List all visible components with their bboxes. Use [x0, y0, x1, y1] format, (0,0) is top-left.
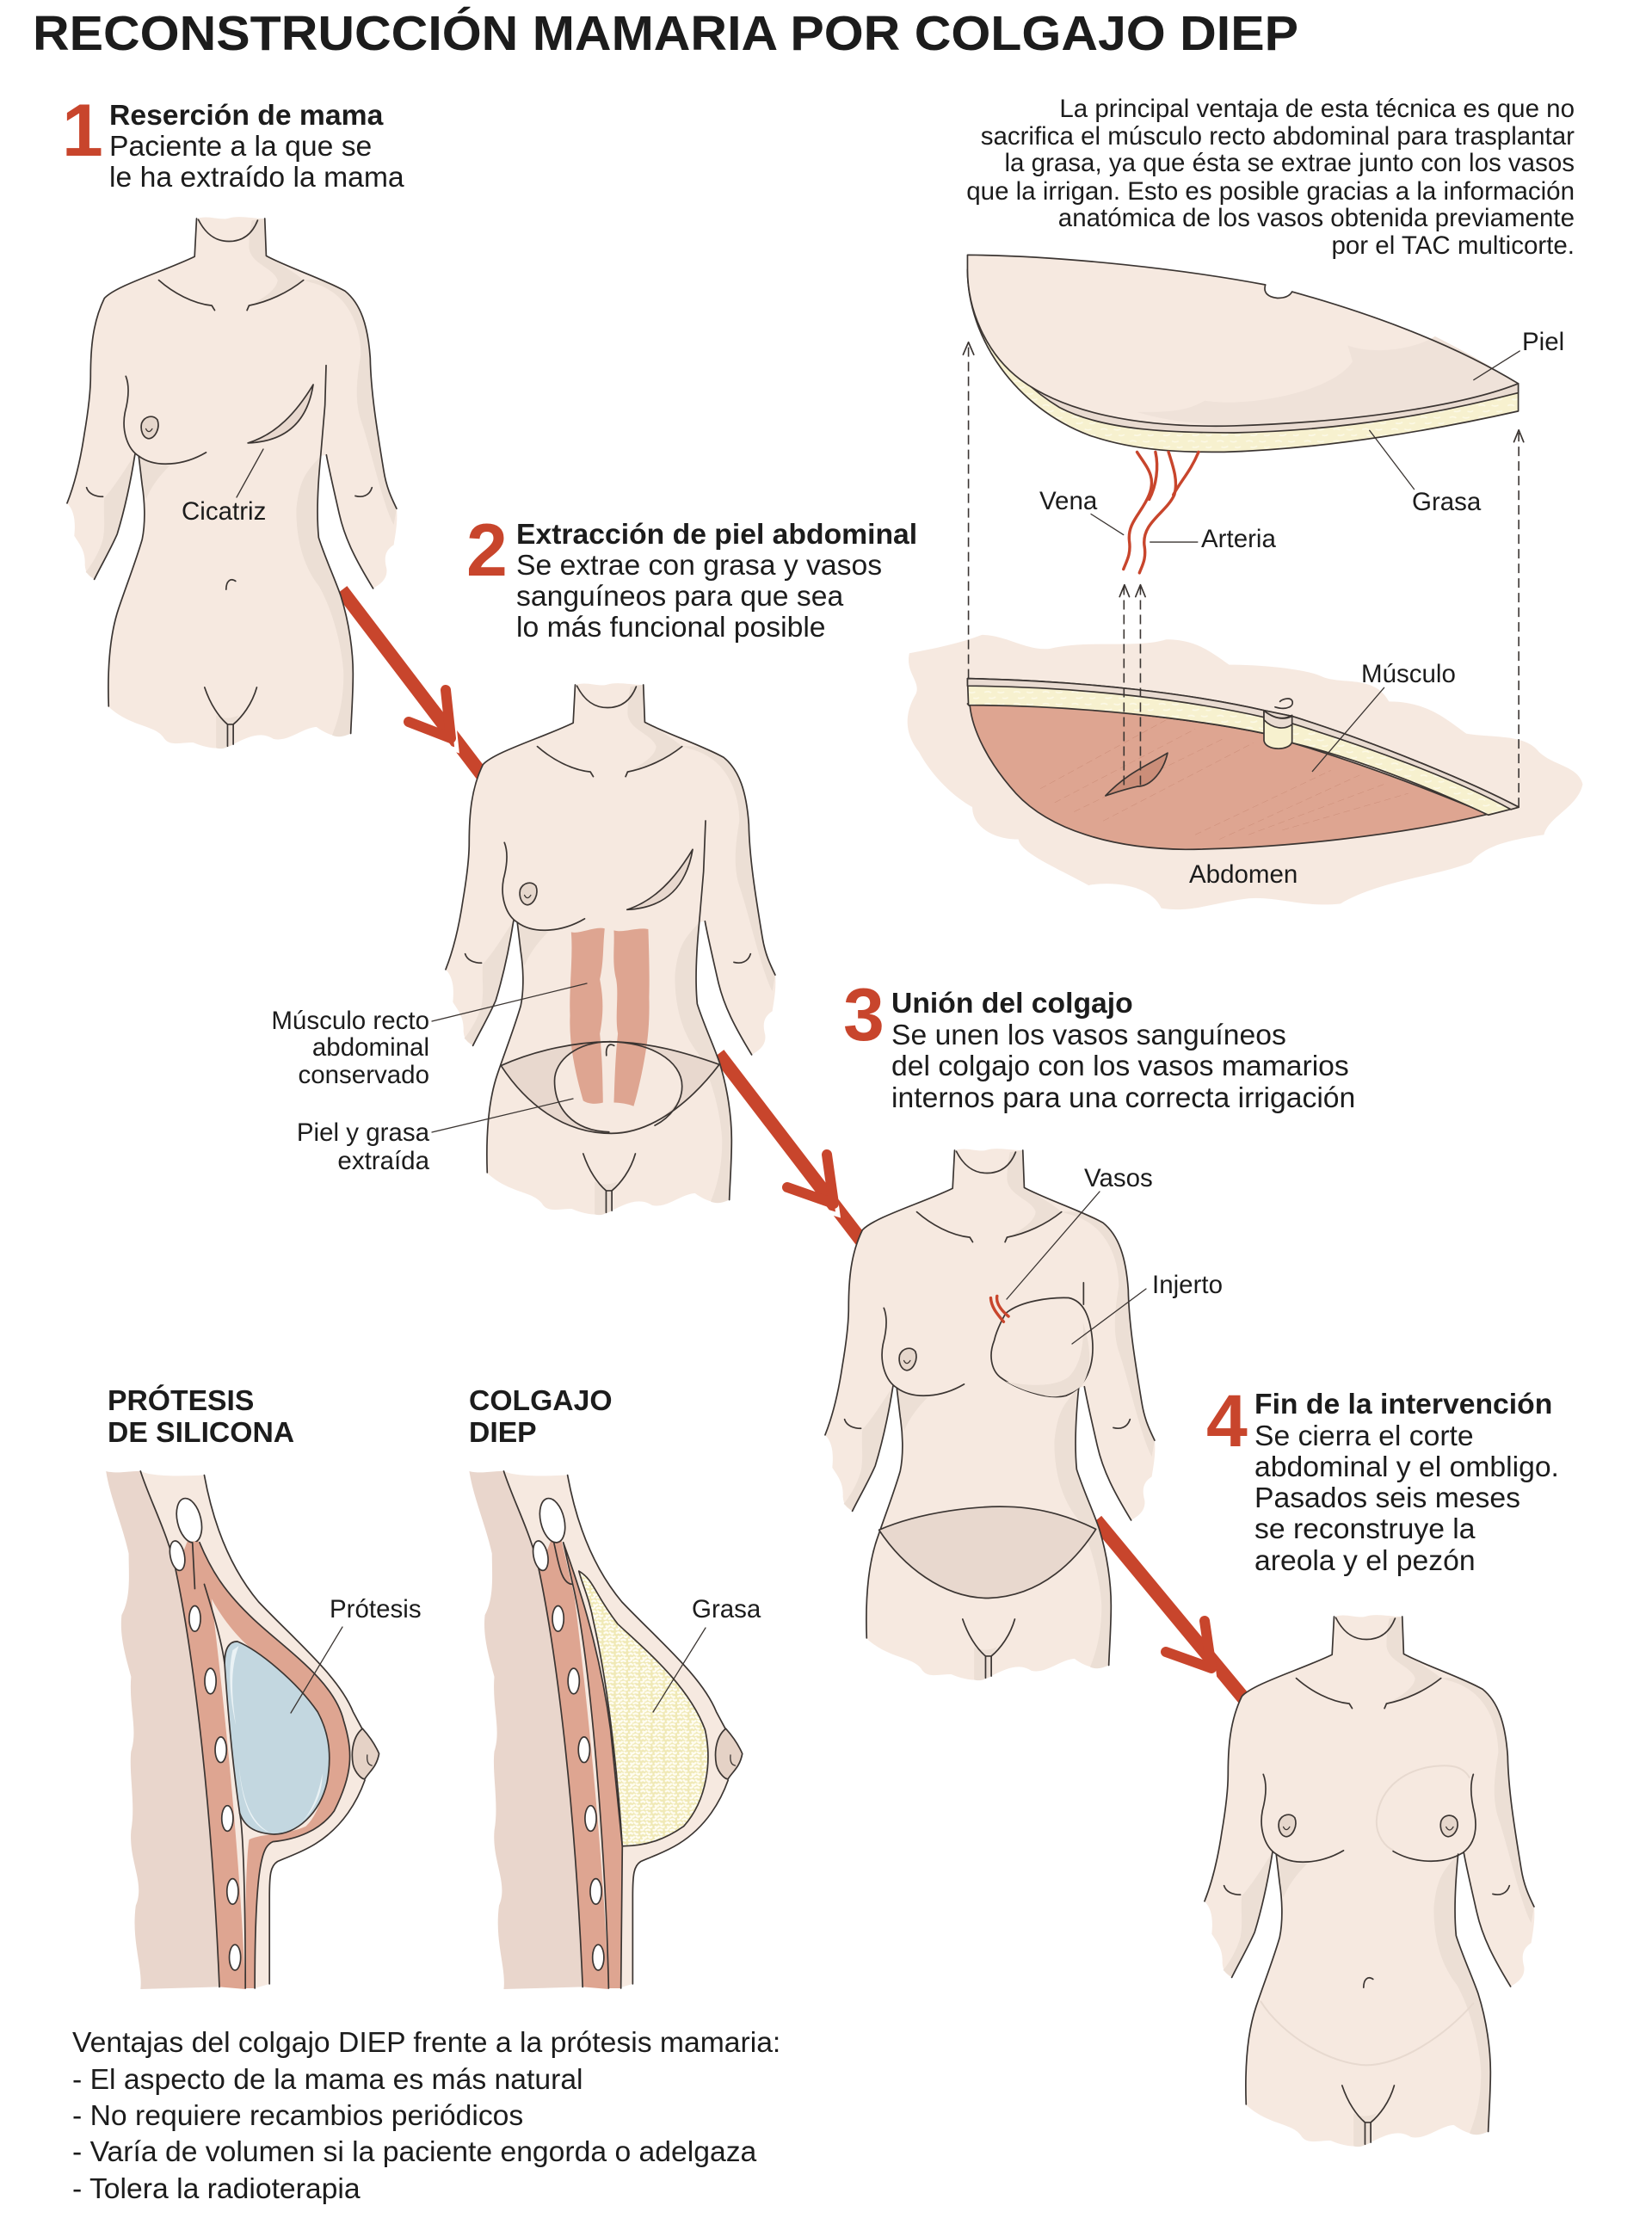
arrow: step 3 to step 4	[1096, 1520, 1258, 1716]
step 2 text: sanguíneos para que sea	[516, 580, 843, 613]
advantages list: Ventajas del colgajo DIEP frente a la prótesis mamaria:	[72, 2026, 780, 2059]
step 2 text: Extracción de piel abdominal	[516, 518, 917, 551]
diagram: DIEP flap in breast	[469, 1471, 743, 1989]
step 4 text: Pasados seis meses	[1254, 1482, 1520, 1514]
incision	[1106, 753, 1168, 796]
label: prótesis	[291, 1595, 422, 1713]
top-right explanatory text: la grasa, ya que ésta se extrae junto con los vasos	[1005, 149, 1575, 177]
step 1 text	[62, 89, 404, 194]
advantages list	[72, 2026, 780, 2205]
skin layer abdomen	[967, 679, 1519, 810]
step 3 text: Se unen los vasos sanguíneos	[891, 1019, 1286, 1051]
step 2 text: lo más funcional posible	[516, 611, 826, 644]
leader lines	[1091, 351, 1519, 772]
step 1 text: le ha extraído la mama	[109, 161, 404, 194]
step 4 text: abdominal y el ombligo.	[1254, 1451, 1559, 1483]
comparison headings	[108, 1384, 613, 1449]
comparison headings: DE SILICONA	[108, 1416, 294, 1449]
figure 2: abdominal skin extraction	[446, 683, 775, 1215]
abdominal muscle	[967, 704, 1489, 849]
diagram labels: Abdomen	[1189, 860, 1298, 889]
top-right explanatory text	[966, 95, 1575, 260]
figure 4: end result	[1205, 1615, 1534, 2147]
comparison headings: DIEP	[469, 1416, 537, 1449]
step 4 text: 4	[1206, 1380, 1248, 1463]
flap top surface	[967, 255, 1519, 426]
abdomen background	[908, 635, 1582, 909]
label: injerto: Injerto	[1152, 1271, 1223, 1299]
diagram: silicone implant	[106, 1471, 379, 1989]
flap outline	[967, 255, 1519, 426]
label: músculo recto abdominal conservado: abdominal	[312, 1033, 429, 1062]
dashed arrows	[963, 342, 1524, 807]
label: piel y grasa extraída	[297, 1099, 573, 1175]
step 3 text	[843, 974, 1355, 1114]
label: grasa: Grasa	[692, 1595, 761, 1623]
label: grasa	[653, 1595, 761, 1712]
advantages list: - Varía de volumen si la paciente engorda o adelgaza	[72, 2135, 757, 2168]
skin side flap	[967, 269, 1519, 433]
top-right explanatory text: por el TAC multicorte.	[1331, 231, 1575, 260]
label: vasos	[1007, 1164, 1153, 1299]
label: prótesis: Prótesis	[330, 1595, 422, 1623]
step 3 text: del colgajo con los vasos mamarios	[891, 1050, 1349, 1082]
diagram labels: Arteria	[1201, 525, 1276, 553]
fat layer abdomen	[967, 679, 1519, 815]
diagram labels	[1039, 328, 1564, 889]
diagram labels: Grasa	[1412, 488, 1482, 516]
label: músculo recto abdominal conservado: conservado	[298, 1061, 429, 1089]
step 4 text: Se cierra el corte	[1254, 1420, 1474, 1452]
label: cicatriz: Cicatriz	[182, 497, 266, 526]
top-right explanatory text: anatómica de los vasos obtenida previamente	[1058, 204, 1575, 232]
navel cylinder	[1264, 699, 1292, 749]
step 2 text: 2	[466, 509, 508, 592]
title: RECONSTRUCCIÓN MAMARIA POR COLGAJO DIEP	[33, 6, 1298, 61]
diagram: abdominal flap	[908, 255, 1582, 909]
label: piel y grasa extraída: Piel y grasa	[297, 1118, 430, 1147]
arrow: step 1 to step 2	[342, 590, 492, 788]
diagram labels: Piel	[1522, 328, 1564, 356]
label: injerto	[1072, 1271, 1223, 1344]
advantages list: - Tolera la radioterapia	[72, 2172, 361, 2205]
figure 3: flap attachment	[825, 1149, 1155, 1680]
label: vasos: Vasos	[1084, 1164, 1153, 1192]
label: músculo recto abdominal conservado: Músculo recto	[271, 1007, 429, 1035]
top-right explanatory text: sacrifica el músculo recto abdominal para trasplantar	[981, 122, 1575, 151]
diagram labels: Vena	[1039, 487, 1098, 515]
label: piel y grasa extraída: extraída	[337, 1147, 430, 1175]
step 3 text: Unión del colgajo	[891, 987, 1133, 1020]
step 4 text: Fin de la intervención	[1254, 1388, 1552, 1420]
diagram labels: Músculo	[1361, 660, 1456, 688]
step 4 text: areola y el pezón	[1254, 1544, 1476, 1577]
label: cicatriz	[182, 449, 266, 526]
top-right explanatory text: La principal ventaja de esta técnica es que no	[1059, 95, 1575, 123]
step 4 text: se reconstruye la	[1254, 1513, 1476, 1545]
fat layer flap	[967, 269, 1519, 452]
label: músculo recto abdominal conservado	[271, 983, 587, 1089]
step 3 text: 3	[843, 974, 885, 1057]
arrow: step 2 to step 3	[718, 1054, 876, 1260]
comparison headings: COLGAJO	[469, 1384, 613, 1417]
step 3 text: internos para una correcta irrigación	[891, 1081, 1355, 1114]
figure 1: patient after mastectomy	[67, 217, 397, 749]
step 1 text: 1	[62, 89, 103, 172]
step 1 text: Paciente a la que se	[109, 130, 372, 163]
top-right explanatory text: que la irrigan. Esto es posible gracias a la información	[966, 177, 1575, 206]
step 4 text	[1206, 1380, 1559, 1577]
advantages list: - No requiere recambios periódicos	[72, 2099, 523, 2132]
comparison headings: PRÓTESIS	[108, 1384, 254, 1417]
step 2 text: Se extrae con grasa y vasos	[516, 549, 882, 582]
vessels	[1124, 452, 1199, 573]
advantages list: - El aspecto de la mama es más natural	[72, 2063, 583, 2096]
step 2 text	[466, 509, 917, 644]
flap shading	[1137, 336, 1517, 425]
step 1 text: Reserción de mama	[109, 99, 384, 132]
